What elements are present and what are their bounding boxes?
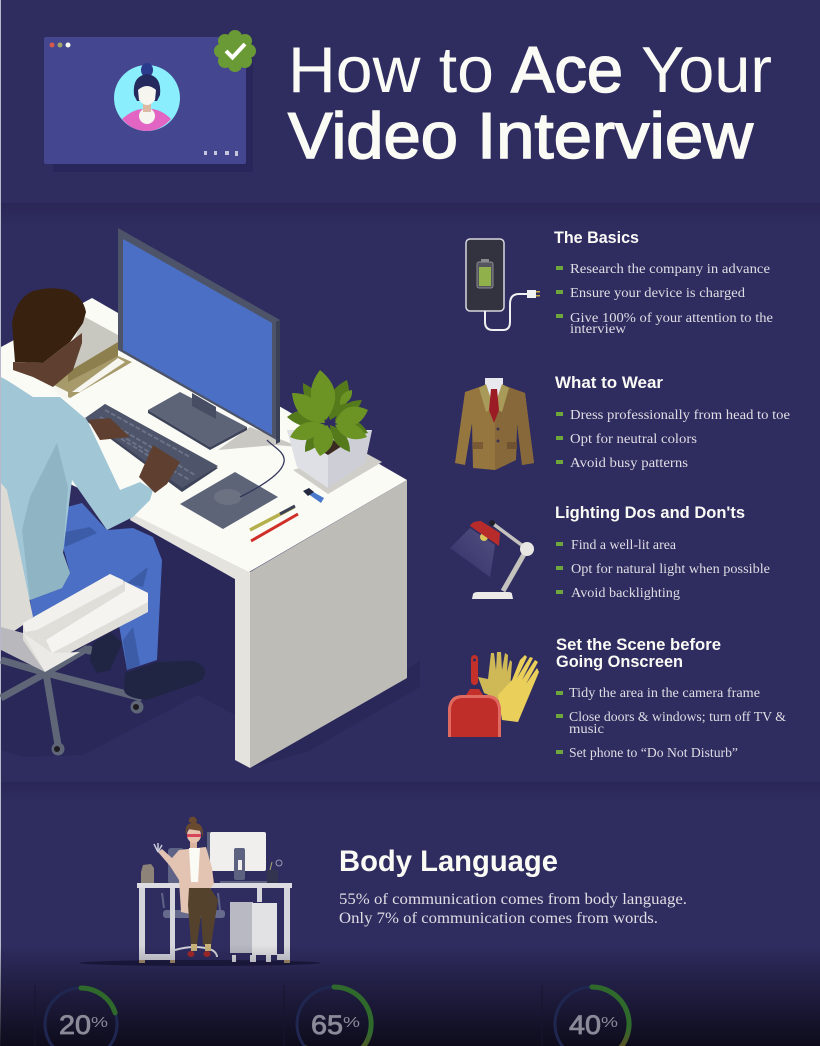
section: what to wear: Avoid busy patterns — [570, 456, 688, 471]
section: set the scene: music — [569, 722, 604, 737]
section: the basics: The Basics — [554, 228, 639, 247]
illustration: mouse pad, mouse and cable — [180, 440, 284, 529]
section: lighting: Find a well-lit area — [571, 538, 677, 553]
stat: 65 percent: % — [343, 1014, 360, 1031]
stat: 20 percent — [35, 985, 117, 1046]
stat: 65 percent — [284, 985, 371, 1046]
illustration: office chair back and arm — [1, 483, 148, 672]
title — [288, 33, 772, 172]
illustration: shoes — [90, 632, 205, 700]
title: Your — [641, 33, 772, 106]
section: set the scene: Going Onscreen — [556, 652, 683, 671]
stat: 65 percent: 65 — [311, 1010, 343, 1040]
illustration: USB stick — [303, 488, 324, 503]
section: set the scene — [556, 635, 786, 761]
section: what to wear — [555, 373, 790, 471]
illustration: woman at desk — [80, 817, 320, 966]
stat: 40 percent: 40 — [569, 1010, 601, 1040]
illustration: person — [1, 288, 180, 600]
section: lighting: Opt for natural light when possible — [571, 562, 770, 577]
section: what to wear: What to Wear — [555, 373, 663, 392]
section: the basics — [554, 228, 773, 337]
section: the basics: interview — [570, 322, 627, 337]
section: the basics: Ensure your device is charged — [570, 286, 745, 301]
section: lighting — [555, 503, 770, 601]
section: set the scene: Close doors & windows; turn off TV & — [569, 710, 786, 725]
heading: body language: Body Language — [339, 845, 558, 878]
stat: 40 percent — [542, 985, 629, 1046]
title: Ace — [511, 33, 623, 106]
title: How to — [288, 33, 494, 106]
section: what to wear: Opt for neutral colors — [570, 432, 697, 447]
body language text — [339, 891, 687, 927]
body language text: Only 7% of communication comes from words. — [339, 910, 658, 927]
stat: 20 percent: % — [91, 1014, 108, 1031]
section: lighting: Avoid backlighting — [571, 586, 680, 601]
desk — [137, 883, 292, 963]
floor shadow — [1, 515, 420, 768]
icon: dustpan and gloves — [448, 652, 539, 737]
section: the basics: Research the company in advance — [570, 262, 770, 277]
stat: 40 percent: % — [601, 1014, 618, 1031]
body language text: 55% of communication comes from body language. — [339, 891, 687, 908]
section: set the scene: Set the Scene before — [556, 635, 721, 654]
title: Interview — [477, 99, 754, 172]
icon: verified check badge — [214, 30, 256, 72]
icon: desk lamp — [450, 520, 534, 599]
section: lighting: Lighting Dos and Don'ts — [555, 503, 745, 522]
illustration: keyboard — [85, 404, 218, 492]
illustration: books and papers — [54, 317, 132, 400]
icon: suit jacket — [455, 378, 534, 470]
section: set the scene: Tidy the area in the camera frame — [569, 686, 760, 701]
section: set the scene: Set phone to “Do Not Disturb” — [569, 746, 738, 761]
stat: 20 percent: 20 — [59, 1010, 91, 1040]
section: the basics: Give 100% of your attention to the — [570, 311, 773, 326]
illustration: desk — [1, 298, 407, 768]
illustration: potted plant — [287, 370, 372, 488]
tower — [230, 902, 277, 962]
icon: phone charging — [466, 239, 540, 330]
illustration: monitor — [118, 228, 280, 450]
illustration: trousers — [30, 503, 162, 670]
illustration: office chair base — [1, 646, 144, 756]
title: Video — [288, 99, 458, 172]
illustration: pens — [250, 506, 298, 541]
section: what to wear: Dress professionally from head to toe — [570, 408, 790, 423]
video call window icon — [44, 37, 253, 172]
